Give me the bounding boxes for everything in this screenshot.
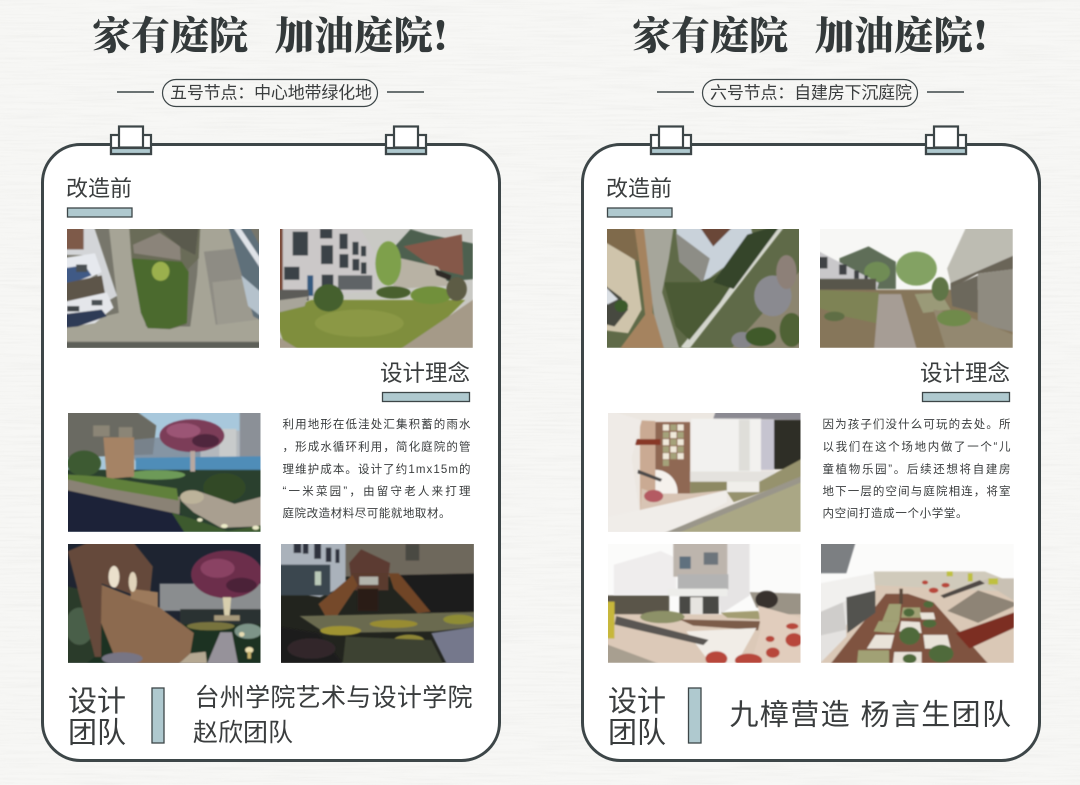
text block: design concept: 内空间打造成一个小学堂。 <box>822 506 968 520</box>
binder clip: left <box>651 126 691 154</box>
poster: left, node five <box>42 6 500 760</box>
photo: aerial of courtyard before <box>67 229 259 348</box>
text block: design concept: 因为孩子们没什么可玩的去处。所 <box>822 417 1011 431</box>
heading bar <box>922 392 1010 402</box>
text block: design concept <box>282 417 471 520</box>
heading: before renovation: 改造前 <box>606 176 672 201</box>
team name: 台州学院艺术与设计学院 <box>194 684 472 712</box>
subtitle pill: node six: 六号节点：自建房下沉庭院 <box>710 84 912 102</box>
team label line two: 团队 <box>608 716 666 750</box>
title: right <box>632 6 988 62</box>
card panel <box>582 144 1040 760</box>
binder clip: left <box>111 126 151 154</box>
render: garden with water and gabions <box>68 413 260 532</box>
binder clip: right <box>386 126 426 154</box>
text block: design concept: 以我们在这个场地内做了一个“儿 <box>822 440 1011 454</box>
team label: 设计 <box>68 685 126 718</box>
subtitle pill: node five <box>117 80 424 106</box>
heading: design concept: 设计理念 <box>920 361 1010 386</box>
render: planting beds and red stairs <box>821 544 1014 663</box>
text block: design concept: ，形成水循环利用，简化庭院的管 <box>282 440 470 454</box>
team block <box>608 685 1011 750</box>
title: left: 家有庭院 <box>92 6 248 62</box>
title: right: 家有庭院 <box>632 6 788 62</box>
render: site plan <box>608 413 800 532</box>
team name line two: 赵欣团队 <box>193 719 293 747</box>
team block <box>68 684 472 750</box>
binder clip: right <box>926 126 966 154</box>
heading bar <box>68 208 132 217</box>
divider bar <box>688 688 701 743</box>
render: house with slide and red domes <box>608 544 800 663</box>
card panel <box>42 144 500 760</box>
subtitle pill: node five: 五号节点：中心地带绿化地 <box>170 84 372 102</box>
subtitle pill: node six <box>657 80 964 106</box>
photo: overgrown ditch before <box>820 229 1013 348</box>
heading bar <box>382 392 470 402</box>
team label: 设计 <box>608 685 666 718</box>
text block: design concept: 利用地形在低洼处汇集积蓄的雨水 <box>282 417 471 431</box>
text block: design concept: 地下一层的空间与庭院相连，将室 <box>822 484 1010 498</box>
photo: aerial of site before <box>607 229 799 348</box>
render: wooden stairs at night <box>68 544 260 663</box>
render: playhouse and slide at night <box>281 544 474 663</box>
poster: right, node six <box>582 6 1040 760</box>
text block: design concept: 庭院改造材料尽可能就地取材。 <box>282 506 450 520</box>
team name: 九樟营造 杨言生团队 <box>730 698 1011 732</box>
title: right: 加油庭院! <box>815 6 988 62</box>
team label line two: 团队 <box>68 716 126 750</box>
text block: design concept <box>822 417 1011 520</box>
photo: courtyard grass before <box>280 229 473 348</box>
title: left: 加油庭院! <box>275 6 448 62</box>
text block: design concept: 理维护成本。设计了约1mx15m的 <box>282 462 470 476</box>
text block: design concept: “一米菜园”，由留守老人来打理 <box>282 484 471 498</box>
heading: before renovation: 改造前 <box>66 176 132 201</box>
text block: design concept: 童植物乐园”。后续还想将自建房 <box>822 462 1010 476</box>
heading bar <box>608 208 672 217</box>
title: left <box>92 6 448 62</box>
divider bar <box>152 688 164 743</box>
heading: design concept: 设计理念 <box>380 361 470 386</box>
